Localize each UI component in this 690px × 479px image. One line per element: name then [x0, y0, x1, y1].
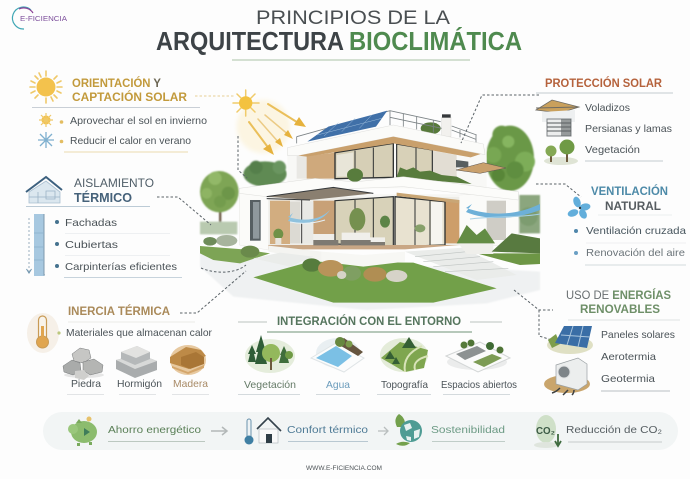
panel: ventilación natural [567, 185, 686, 265]
panel: protección solar [536, 77, 673, 165]
upper windows [335, 143, 393, 179]
lower wood [270, 201, 290, 244]
title: ARQUITECTURA [156, 26, 344, 56]
icon: blinds [547, 119, 571, 136]
panel: ventilación natural: NATURAL [605, 201, 661, 213]
icon: CO2 reduction: CO₂ [536, 426, 555, 437]
panel: orientación y captación solar: Reducir el calor en verano [70, 135, 191, 147]
panel: uso de energías renovables: Geotermia [601, 373, 655, 385]
panel: aislamiento térmico: Cubiertas [65, 239, 118, 251]
icon: fan [567, 196, 591, 220]
arrow [211, 427, 227, 435]
mid slab [239, 177, 518, 200]
icon: open spaces [446, 340, 510, 372]
panel: aislamiento térmico [26, 176, 182, 278]
logo: E-Ficiencia: E-FICIENCIA [20, 16, 67, 23]
solar panels [307, 111, 387, 142]
panel: ventilación natural: Ventilación cruzada [586, 225, 686, 237]
terrace [268, 245, 458, 249]
panel: uso de energías renovables: USO DE ENERGÍAS [566, 289, 671, 302]
icon: house sun [233, 90, 259, 116]
panel: protección solar: Voladizos [585, 102, 630, 114]
panel: protección solar: Persianas y lamas [585, 123, 672, 135]
panel: orientación y captación solar: ORIENTACIÓN Y [72, 75, 161, 90]
panel: uso de energías renovables [544, 289, 680, 395]
panel: benefits strip: Confort térmico [287, 424, 368, 436]
arrow [378, 427, 388, 435]
panel: inercia térmica: Madera [173, 378, 208, 390]
panel: orientación y captación solar: Aprovechar el sol en invierno [70, 115, 207, 127]
rooftop garden and chimney [421, 122, 441, 134]
arrows: sun rays [249, 104, 306, 155]
panel: aislamiento térmico: AISLAMIENTO [74, 176, 154, 190]
upper block [287, 148, 487, 188]
title: PRINCIPIOS DE LA [256, 8, 450, 29]
panel: aislamiento térmico: Fachadas [65, 217, 117, 229]
panel: benefits strip: Ahorro energético [108, 424, 201, 436]
lower block [239, 188, 518, 250]
panel: benefits strip: Reducción de CO₂ [566, 424, 662, 436]
arrows: air flow [288, 204, 540, 223]
panel: inercia térmica [27, 305, 212, 394]
lower glass [335, 197, 393, 247]
panel: protección solar: PROTECCIÓN SOLAR [545, 77, 663, 90]
panel: inercia térmica: Hormigón [117, 378, 162, 390]
shrubs [203, 225, 540, 282]
panel: integración con el entorno: Topografía [381, 379, 428, 391]
icon: forest [245, 335, 295, 373]
connector: dotted leaders [157, 95, 581, 340]
title [156, 8, 522, 60]
panel: integración con el entorno: Espacios abiertos [441, 379, 517, 391]
awning right [456, 163, 506, 173]
icon: insulated house [26, 177, 62, 203]
panel: benefits strip [43, 412, 678, 450]
panel: orientación y captación solar: CAPTACIÓN SOLAR [72, 89, 187, 104]
icon: thermometer and house [244, 418, 281, 444]
title: BIOCLIMÁTICA [349, 26, 522, 56]
icon: stone [63, 348, 104, 380]
upper planters [347, 168, 363, 182]
house structure [239, 111, 518, 280]
icon: CO2 reduction [534, 415, 561, 448]
lawns [200, 246, 540, 303]
footer url: WWW.E-FICIENCIA.COM [306, 465, 382, 472]
icon: wood [170, 345, 206, 375]
panel: ventilación natural: VENTILACIÓN [591, 185, 668, 198]
roof slab [287, 125, 485, 155]
icon: solar panel [547, 326, 593, 354]
panel: protección solar: Vegetación [585, 144, 640, 156]
icon: small sun [39, 113, 53, 127]
background trees [200, 126, 540, 234]
panel: integración con el entorno: INTEGRACIÓN CON EL ENTORNO [277, 315, 461, 328]
icon: sun [30, 71, 62, 103]
pergola [267, 187, 373, 200]
icon: insulation wall section [26, 214, 45, 276]
panel: uso de energías renovables: Paneles solares [601, 329, 675, 341]
icon: concrete blocks [116, 346, 157, 378]
panel: inercia térmica: Piedra [71, 378, 101, 390]
icon: snowflake [38, 132, 54, 148]
icon: piggy bank [68, 416, 97, 446]
panel: ventilación natural: Renovación del aire [586, 247, 685, 259]
panel: aislamiento térmico: Carpinterías eficientes [65, 261, 177, 273]
panel: uso de energías renovables: RENOVABLES [580, 304, 660, 316]
panel: orientación y captación solar [30, 71, 207, 152]
icon: water [311, 337, 364, 372]
panel: uso de energías renovables: Aerotermia [601, 351, 656, 363]
paving [200, 253, 540, 310]
icon: thermometer [27, 313, 59, 353]
panel: integración con el entorno: Vegetación [244, 379, 296, 391]
plinth and steps [268, 246, 322, 262]
railing [297, 111, 477, 143]
illustration: bioclimatic house [200, 100, 540, 310]
panel: benefits strip: Sostenibilidad [431, 424, 505, 436]
logo: E-Ficiencia [12, 7, 67, 29]
panel: integración con el entorno [238, 315, 517, 394]
icon: globe with leaves [395, 414, 422, 446]
icon: overhang [536, 100, 579, 122]
icon: trees [544, 140, 578, 165]
panel: inercia térmica: INERCIA TÉRMICA [68, 305, 170, 318]
panel: aislamiento térmico: TÉRMICO [74, 190, 132, 205]
panel: integración con el entorno: Agua [326, 379, 350, 391]
sun glow [237, 100, 290, 153]
icon: heat pump [544, 358, 590, 395]
furniture [313, 233, 385, 242]
icon: topography [380, 337, 428, 372]
panel: inercia térmica: Materiales que almacenan calor [66, 327, 212, 339]
